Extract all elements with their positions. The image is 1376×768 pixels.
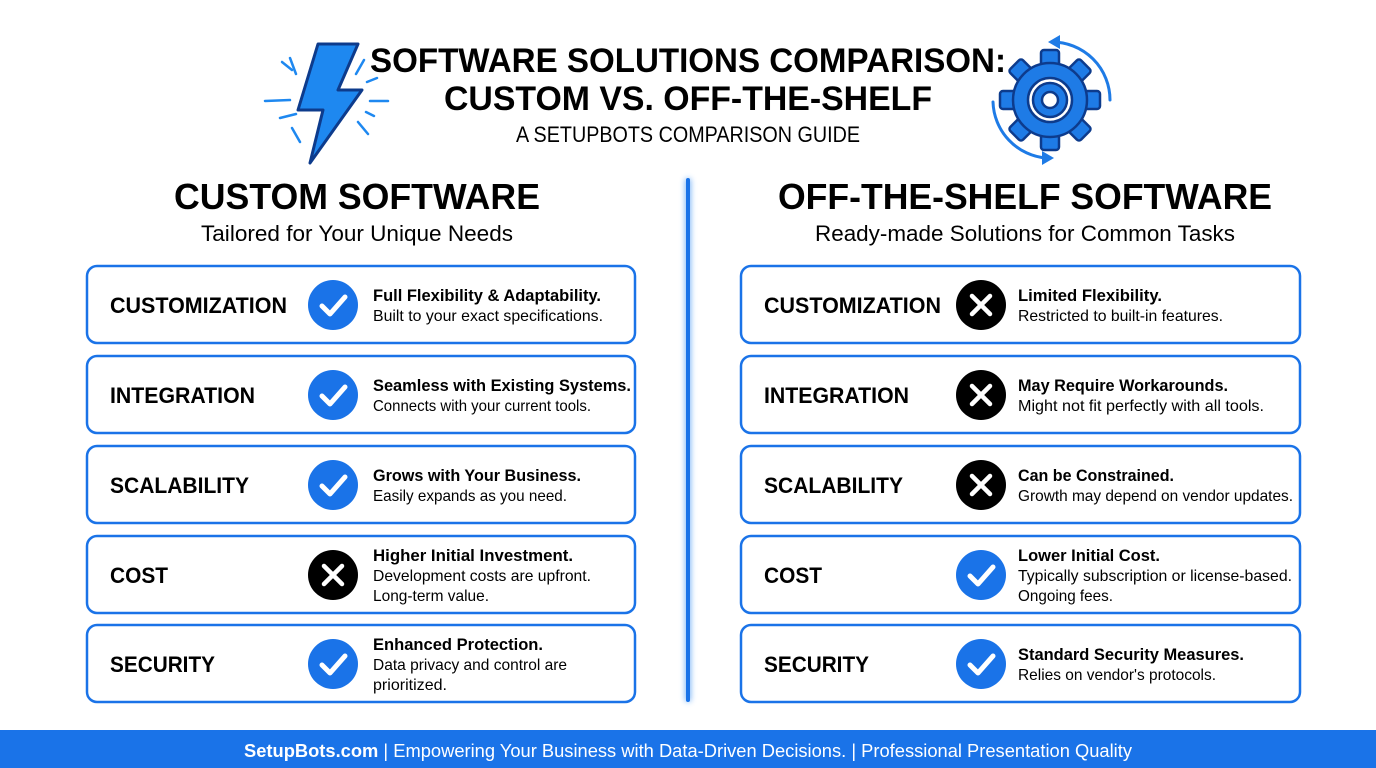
row: custom security: SECURITY (110, 652, 215, 677)
row: ots integration (741, 356, 1300, 433)
row: custom security: prioritized. (373, 677, 447, 694)
row: ots scalability: SCALABILITY (764, 473, 903, 498)
heading: custom software: Tailored for Your Unique Needs (201, 221, 513, 246)
divider (685, 178, 691, 702)
row: ots customization: Limited Flexibility. (1018, 286, 1162, 305)
panel: custom software rows (87, 266, 635, 702)
heading: custom software: CUSTOM SOFTWARE (174, 176, 540, 217)
row: custom cost: COST (110, 563, 169, 588)
row: ots customization (741, 266, 1300, 343)
row: ots security: SECURITY (764, 652, 869, 677)
heading: off-the-shelf software (778, 176, 1272, 246)
row: custom security: Enhanced Protection. (373, 635, 543, 654)
row: custom scalability: Grows with Your Business. (373, 466, 581, 485)
row: ots customization: CUSTOMIZATION (764, 293, 941, 318)
row: custom cost (87, 536, 635, 613)
row: ots cost: COST (764, 563, 823, 588)
row: ots cost (741, 536, 1300, 613)
subtitle: A SETUPBOTS COMPARISON GUIDE (516, 122, 860, 147)
row: custom customization (87, 266, 635, 343)
row: ots integration: INTEGRATION (764, 383, 909, 408)
row: ots security (741, 625, 1300, 702)
row: custom security (87, 625, 635, 702)
row: custom scalability: Easily expands as you need. (373, 488, 567, 505)
row: custom integration: INTEGRATION (110, 383, 255, 408)
heading: custom software (174, 176, 540, 246)
row: ots scalability: Growth may depend on vendor updates. (1018, 488, 1293, 505)
heading: off-the-shelf software: OFF-THE-SHELF SOFTWARE (778, 176, 1272, 217)
row: ots integration: Might not fit perfectly with all tools. (1018, 398, 1264, 415)
row: ots customization: Restricted to built-in features. (1018, 308, 1223, 325)
row: custom integration: Connects with your current tools. (373, 398, 591, 415)
footer: SetupBots.com | Empowering Your Business with Data-Driven Decisions. | Professional Presentation Quality (244, 741, 1132, 761)
row: ots security: Standard Security Measures. (1018, 645, 1244, 664)
title: SOFTWARE SOLUTIONS COMPARISON: (370, 42, 1006, 80)
title: CUSTOM VS. OFF-THE-SHELF (444, 80, 932, 118)
row: ots cost: Ongoing fees. (1018, 588, 1113, 605)
row: custom integration (87, 356, 635, 433)
row: custom scalability (87, 446, 635, 523)
row: ots integration: May Require Workarounds. (1018, 376, 1228, 395)
row: ots scalability (741, 446, 1300, 523)
panel: off-the-shelf rows (741, 266, 1300, 702)
row: custom integration: Seamless with Existing Systems. (373, 376, 631, 395)
row: custom customization: Full Flexibility & Adaptability. (373, 286, 601, 305)
row: custom customization: Built to your exact specifications. (373, 308, 603, 325)
icon: lightning bolt (265, 44, 388, 163)
row: ots cost: Typically subscription or license-based. (1018, 568, 1292, 585)
row: ots cost: Lower Initial Cost. (1018, 546, 1160, 565)
row: ots scalability: Can be Constrained. (1018, 466, 1174, 485)
row: custom security: Data privacy and control are (373, 657, 567, 674)
row: custom customization: CUSTOMIZATION (110, 293, 287, 318)
row: custom cost: Development costs are upfront. (373, 568, 591, 585)
footer (0, 730, 1376, 768)
row: custom scalability: SCALABILITY (110, 473, 249, 498)
icon: gear with arrows (993, 35, 1110, 165)
title (370, 42, 1006, 118)
row: custom cost: Higher Initial Investment. (373, 546, 573, 565)
row: custom cost: Long-term value. (373, 588, 489, 605)
heading: off-the-shelf software: Ready-made Solutions for Common Tasks (815, 221, 1235, 246)
row: ots security: Relies on vendor's protocols. (1018, 667, 1216, 684)
